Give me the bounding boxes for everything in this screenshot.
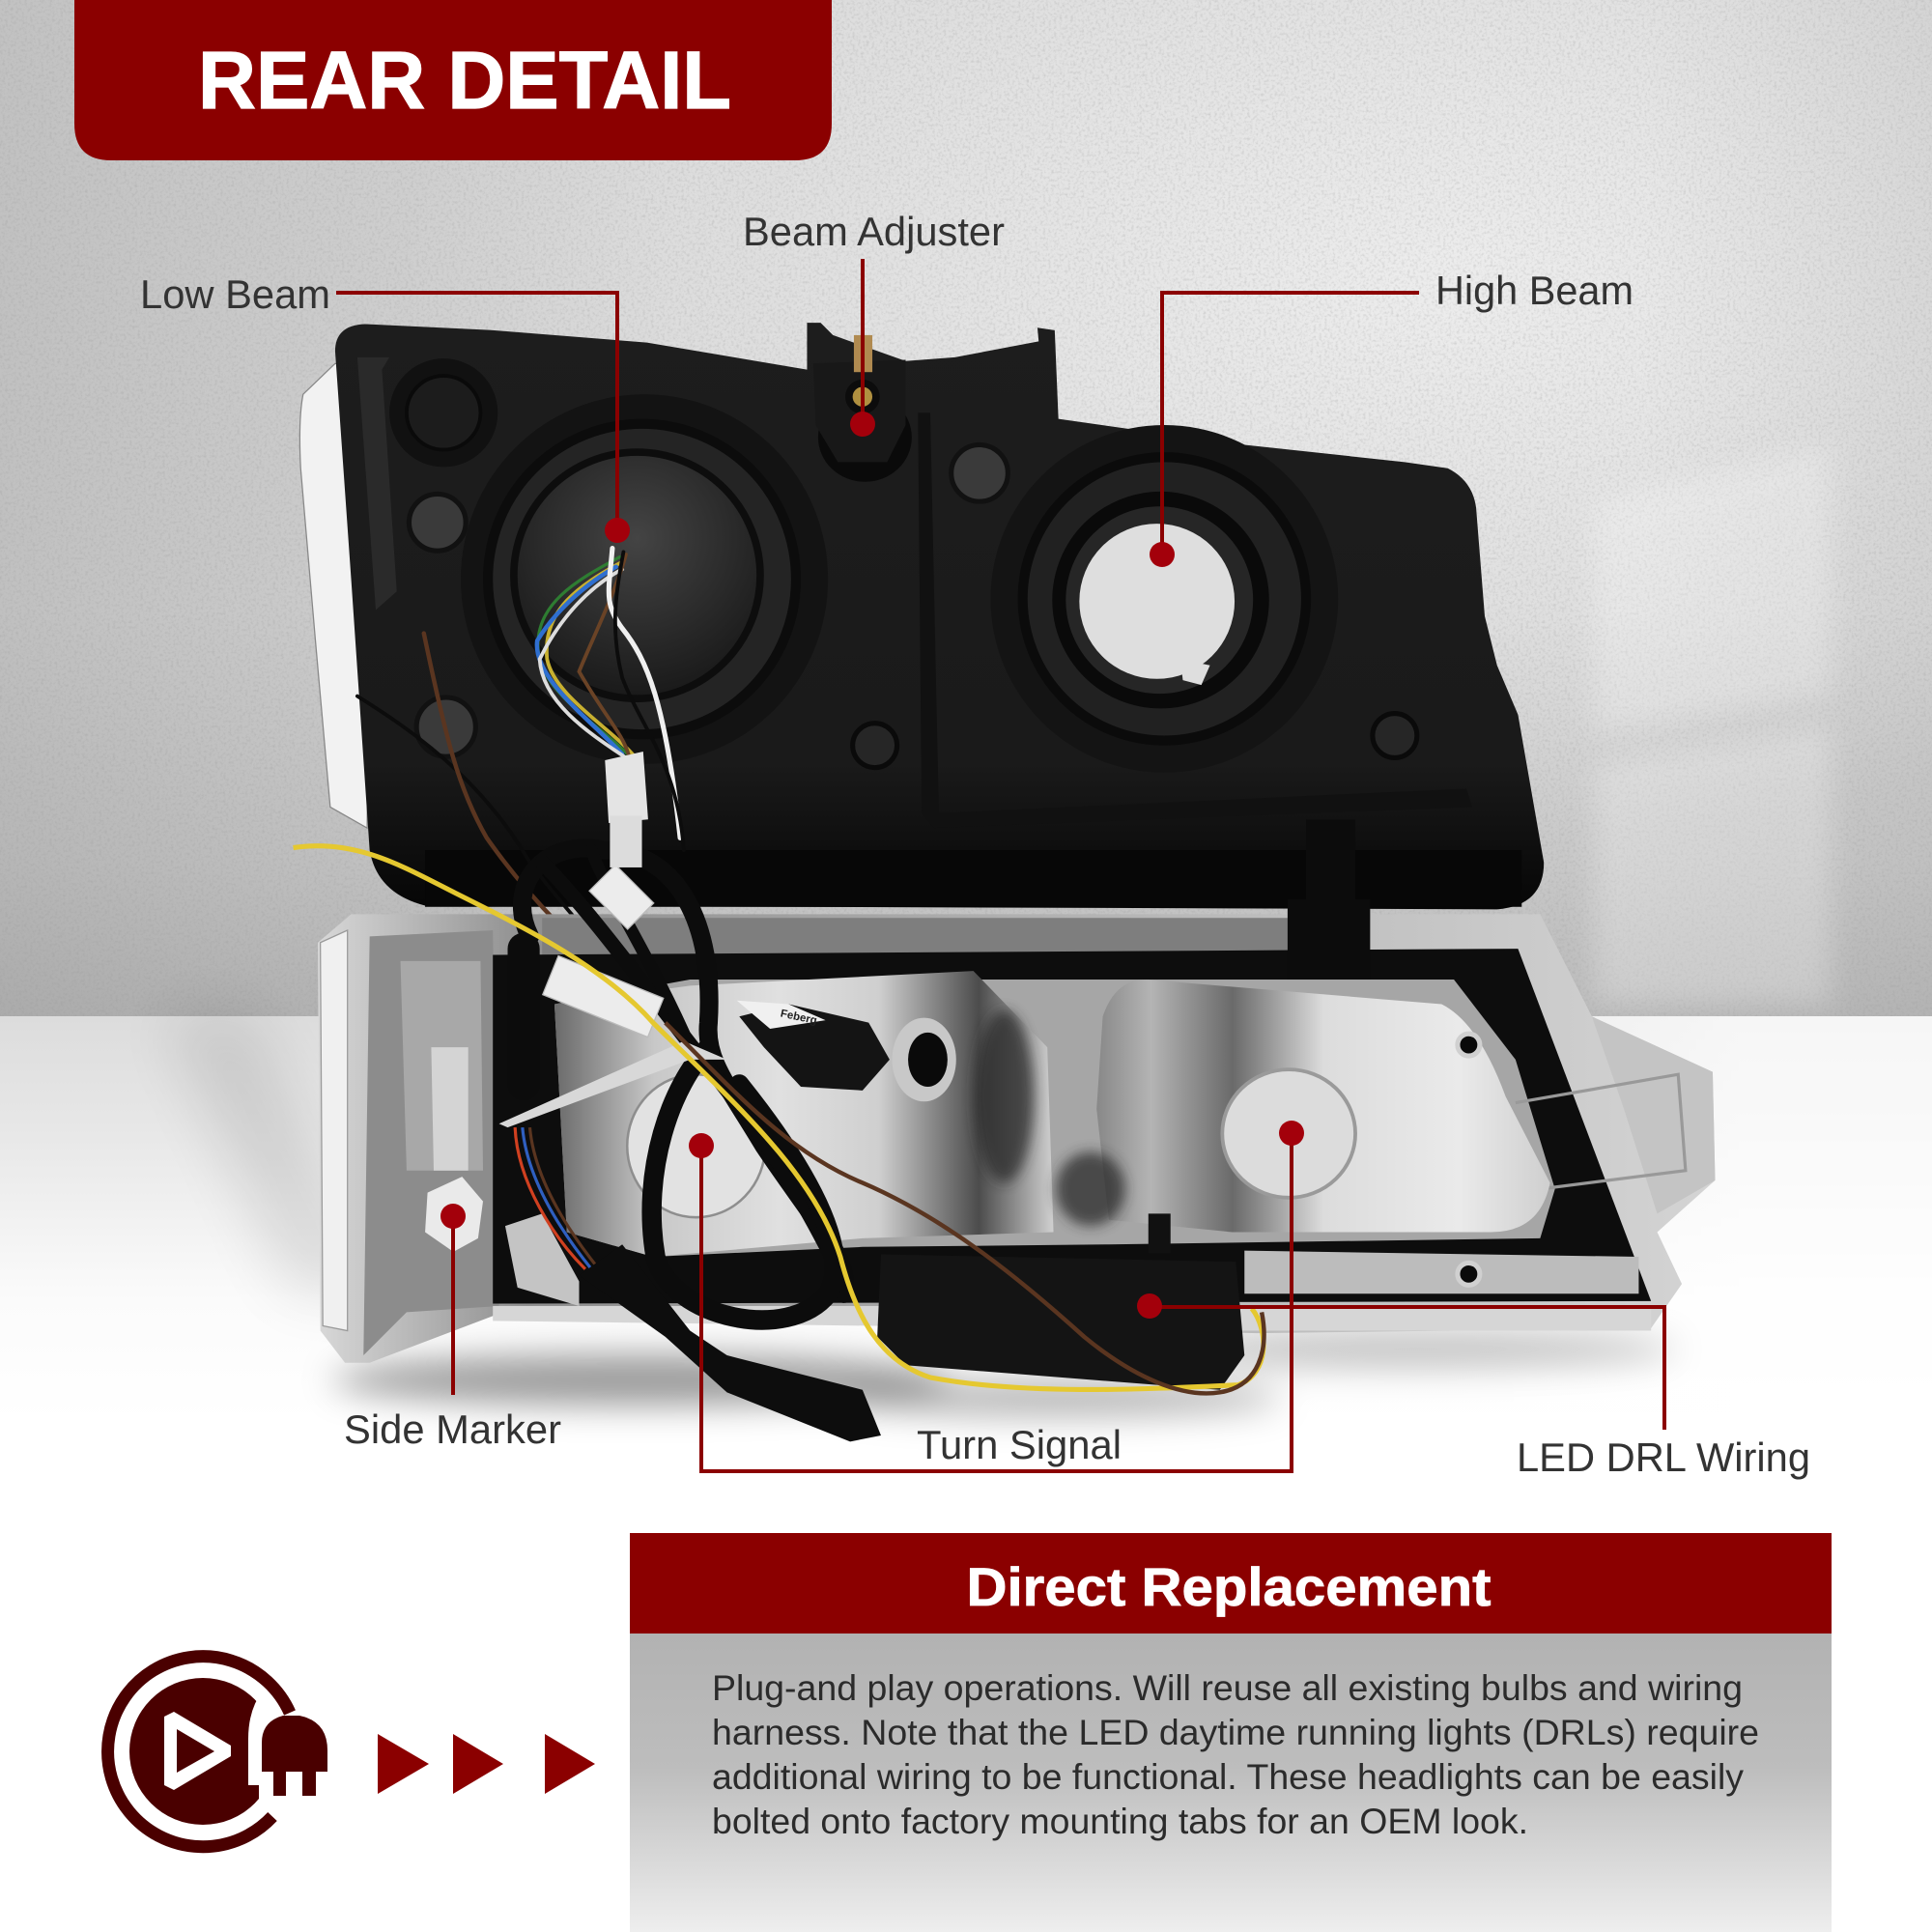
callout: beam adjuster: Beam Adjuster [743, 209, 1005, 254]
reflector hole [892, 1018, 956, 1101]
white connector one [589, 865, 654, 929]
white connector tail [610, 815, 642, 867]
round plugs [409, 444, 1008, 756]
chrome strip of upper housing [299, 363, 370, 828]
lower left bracket [505, 1213, 579, 1306]
taped cable end [579, 1244, 881, 1441]
inner black frame [493, 949, 1651, 1303]
upper housing: black shell [335, 323, 1544, 909]
LED DRL control box [877, 1254, 1244, 1390]
callout: high beam: High Beam [1435, 268, 1634, 313]
cable tie [499, 1041, 727, 1127]
side marker bulb opening [425, 1177, 483, 1252]
callout: side marker: Side Marker [344, 1406, 561, 1452]
side marker housing [363, 930, 499, 1355]
callout: low beam: Low Beam [140, 271, 330, 317]
wiring harness: black cable loops [522, 848, 844, 1320]
chrome side lens strip [321, 930, 348, 1331]
panel body text: additional wiring to be functional. These headlights can be easily [712, 1757, 1745, 1797]
white connector two [543, 955, 664, 1037]
low beam socket [461, 394, 828, 764]
arrow two [453, 1734, 503, 1794]
black mounting strap [1288, 819, 1370, 980]
arrow one [378, 1734, 429, 1794]
panel heading: Direct Replacement [966, 1556, 1492, 1617]
top chrome rail [542, 918, 1293, 955]
bottom chrome rail right [1244, 1251, 1638, 1293]
turn signal bulb opening right [1222, 1069, 1355, 1198]
right reflector [1096, 980, 1550, 1233]
callout: LED DRL wiring [1137, 1293, 1810, 1480]
black bullet connector [737, 1001, 890, 1091]
left reflector [554, 971, 1054, 1257]
right bracket [1592, 1016, 1715, 1213]
callout: LED DRL wiring: LED DRL Wiring [1517, 1435, 1810, 1480]
photo: headlight assembly rear view [294, 323, 1715, 1441]
turn signal bulb opening left [627, 1074, 765, 1217]
panel body text: Plug-and play operations. Will reuse all existing bulbs and wiring [712, 1668, 1743, 1708]
colored wires at lower left [515, 1127, 599, 1269]
callout: turn signal [689, 1121, 1304, 1471]
panel body text [712, 1668, 1759, 1841]
thin brown and black wires over housing [357, 634, 666, 1023]
lower housing: chrome frame [318, 914, 1715, 1363]
brown wire [666, 1023, 1264, 1393]
callout: beam adjuster [743, 209, 1005, 437]
black bullet connector: Feberg [780, 1008, 818, 1027]
callout: side marker [344, 1204, 561, 1452]
yellow wire [294, 846, 1264, 1389]
reflector base [554, 980, 1555, 1257]
header banner: rear detail [74, 0, 832, 160]
bolts [853, 714, 1417, 768]
contact shadow [332, 1332, 1676, 1416]
callout: high beam [1150, 268, 1634, 567]
dark reflector folds [975, 1010, 1125, 1226]
callout: turn signal: Turn Signal [917, 1422, 1122, 1467]
arrow three [545, 1734, 595, 1794]
panel: direct replacement [630, 1533, 1832, 1932]
upper connector [605, 752, 648, 823]
lens cap top left [389, 358, 497, 467]
header banner: rear detail: REAR DETAIL [198, 35, 731, 126]
panel body text: bolted onto factory mounting tabs for an OEM look. [712, 1802, 1528, 1841]
high beam socket with white bulb opening [991, 425, 1338, 773]
callout: low beam [140, 271, 630, 543]
beam adjuster [813, 335, 912, 482]
screw holes [1458, 1034, 1480, 1285]
panel body text: harness. Note that the LED daytime running lights (DRLs) require [712, 1713, 1759, 1752]
low beam wire bundle [537, 549, 684, 850]
icon: play button with plug [108, 1657, 327, 1847]
